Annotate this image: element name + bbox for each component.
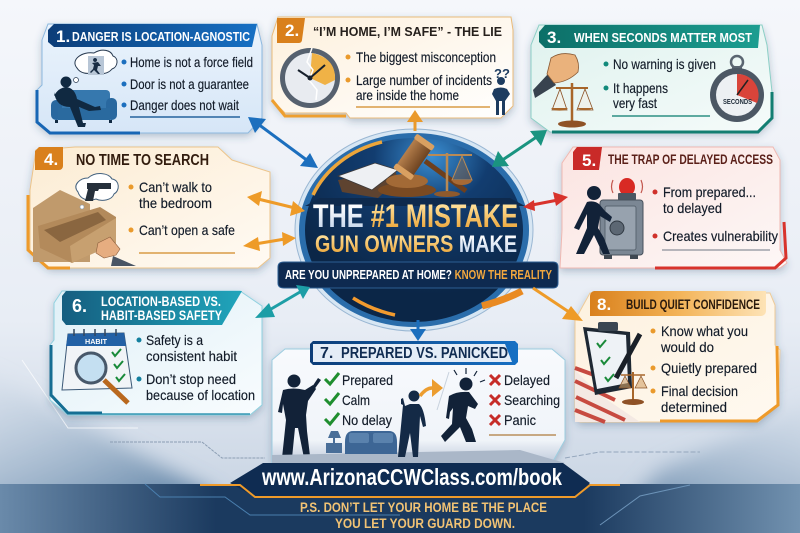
bullet list: are inside the home bbox=[356, 87, 459, 103]
panicked list: Searching bbox=[504, 392, 560, 408]
bullet list: Can’t open a safe bbox=[139, 222, 235, 238]
bullet list bbox=[604, 56, 716, 116]
header: HABIT-BASED SAFETY bbox=[101, 307, 223, 323]
bullet list: determined bbox=[661, 399, 727, 415]
header bbox=[310, 341, 518, 365]
bullet list: the bedroom bbox=[139, 195, 212, 211]
bullet list: to delayed bbox=[663, 200, 722, 216]
bullet list bbox=[136, 332, 255, 403]
arrow: panel 2 link bbox=[407, 110, 423, 131]
prepared list: No delay bbox=[342, 412, 392, 428]
website url: www.ArizonaCCWClass.com/book bbox=[261, 464, 562, 490]
icon: habit calendar and magnifier bbox=[62, 329, 132, 403]
panel 4: no time to search bbox=[28, 147, 270, 268]
bullet list: The biggest misconception bbox=[356, 49, 496, 65]
arrow: panel 4 lower link bbox=[243, 232, 296, 251]
header: 7. bbox=[320, 345, 333, 362]
icon: armed prepared silhouette bbox=[278, 374, 321, 458]
arrow: panel 8 link bbox=[533, 288, 583, 321]
panel 7: prepared vs panicked bbox=[272, 341, 565, 463]
header bbox=[35, 147, 209, 170]
subtitle banner: ARE YOU UNPREPARED AT HOME? KNOW THE REALITY bbox=[285, 268, 553, 282]
bullet list: From prepared... bbox=[663, 184, 756, 200]
bullet list: Know what you bbox=[661, 323, 748, 339]
icon: confused person bbox=[492, 66, 510, 115]
arrow: panel 7 link bbox=[410, 320, 426, 341]
icon: panic cross marks bbox=[490, 375, 500, 425]
header bbox=[62, 291, 242, 325]
bullet list: No warning is given bbox=[613, 56, 716, 72]
icon: drawer and gun bbox=[33, 174, 136, 266]
icon: habit calendar and magnifier: HABIT bbox=[85, 339, 108, 346]
icon: prepared checkmarks bbox=[325, 373, 339, 424]
title: THE #1 MISTAKE bbox=[313, 198, 518, 234]
panel 6: location vs habit bbox=[50, 291, 262, 415]
panel 2: I'm home, I'm safe bbox=[272, 17, 513, 118]
header: NO TIME TO SEARCH bbox=[76, 152, 209, 169]
header bbox=[573, 147, 773, 170]
icon: fist and scales bbox=[533, 54, 593, 128]
bullet list: Final decision bbox=[661, 383, 738, 399]
prepared list bbox=[342, 372, 393, 428]
header bbox=[590, 291, 766, 316]
header bbox=[48, 24, 257, 47]
panicked list: Panic bbox=[504, 412, 536, 428]
bullet list bbox=[128, 179, 235, 253]
icon: broken clock bbox=[280, 48, 340, 108]
panel 8: build quiet confidence bbox=[575, 291, 780, 422]
header: 1. bbox=[56, 27, 70, 46]
header: 8. bbox=[597, 295, 611, 314]
bullet list: Creates vulnerability bbox=[663, 228, 778, 244]
prepared list: Prepared bbox=[342, 372, 393, 388]
header: 6. bbox=[72, 296, 87, 316]
header: 2. bbox=[285, 21, 299, 40]
header bbox=[539, 25, 760, 48]
icon: stopwatch bbox=[710, 56, 764, 122]
prepared list: Calm bbox=[342, 392, 370, 408]
panel 5: trap of delayed access bbox=[560, 147, 787, 268]
icon: confused person: ?? bbox=[494, 66, 510, 81]
bullet list bbox=[346, 49, 496, 107]
bullet list: Can’t walk to bbox=[139, 179, 212, 195]
header: 5. bbox=[582, 151, 596, 170]
closing message bbox=[300, 500, 547, 531]
closing message: YOU LET YOUR GUARD DOWN. bbox=[335, 516, 515, 531]
bullet list: Home is not a force field bbox=[130, 54, 253, 70]
icon: stopwatch: SECONDS bbox=[723, 99, 752, 106]
panel 1: danger is location-agnostic bbox=[37, 24, 262, 133]
closing message: P.S. DON’T LET YOUR HOME BE THE PLACE bbox=[300, 500, 547, 515]
header: 3. bbox=[547, 28, 561, 47]
title bbox=[313, 198, 518, 258]
header: 4. bbox=[44, 150, 58, 169]
bullet list: Door is not a guarantee bbox=[130, 76, 249, 92]
connector arrows bbox=[243, 110, 583, 341]
icon: calm figure bbox=[398, 390, 426, 457]
arc accents bbox=[313, 142, 522, 315]
footer banner bbox=[200, 463, 620, 531]
arrow: panel 3 link bbox=[492, 130, 547, 167]
bullet list: Don’t stop need bbox=[146, 371, 236, 387]
icon: man on couch thinking bbox=[51, 50, 117, 127]
bullet list: would do bbox=[660, 339, 714, 355]
bullet list: consistent habit bbox=[146, 348, 237, 364]
bullet list: very fast bbox=[613, 95, 657, 111]
icon: couch and lamp bbox=[272, 431, 565, 463]
header: LOCATION-BASED VS. bbox=[101, 293, 221, 309]
bullet list: Quietly prepared bbox=[661, 360, 757, 376]
panicked list bbox=[489, 372, 560, 435]
bullet list: It happens bbox=[613, 80, 668, 96]
arrow: panel 4 upper link bbox=[247, 191, 305, 216]
header: “I’M HOME, I’M SAFE” - THE LIE bbox=[313, 24, 502, 39]
header: PREPARED VS. PANICKED bbox=[341, 345, 508, 362]
icon: panicked figure bbox=[441, 368, 485, 442]
arrow: panel 5 link bbox=[523, 192, 568, 211]
bullet list bbox=[122, 54, 253, 117]
bullet list bbox=[650, 323, 757, 415]
central emblem bbox=[278, 129, 558, 331]
bullet list: Danger does not wait bbox=[130, 97, 239, 113]
icon: person at alarmed safe bbox=[574, 178, 643, 259]
icon: clipboard, flag stripes and scales bbox=[575, 322, 647, 422]
icon: law book, gavel and scales bbox=[305, 133, 525, 206]
arrow: orange transition bbox=[420, 379, 443, 397]
subtitle banner bbox=[278, 262, 558, 288]
title: GUN OWNERS MAKE bbox=[315, 231, 517, 258]
bullet list: Safety is a bbox=[146, 332, 203, 348]
arrow: panel 1 link bbox=[248, 117, 318, 168]
bullet list bbox=[652, 184, 778, 250]
bullet list: Large number of incidents bbox=[356, 72, 492, 88]
bullet list: because of location bbox=[146, 387, 255, 403]
header: DANGER IS LOCATION-AGNOSTIC bbox=[72, 29, 251, 44]
arrow: panel 6 link bbox=[255, 285, 310, 318]
header bbox=[277, 18, 502, 43]
panicked list: Delayed bbox=[504, 372, 550, 388]
panel 3: when seconds matter most bbox=[531, 25, 772, 132]
header: WHEN SECONDS MATTER MOST bbox=[574, 30, 752, 45]
